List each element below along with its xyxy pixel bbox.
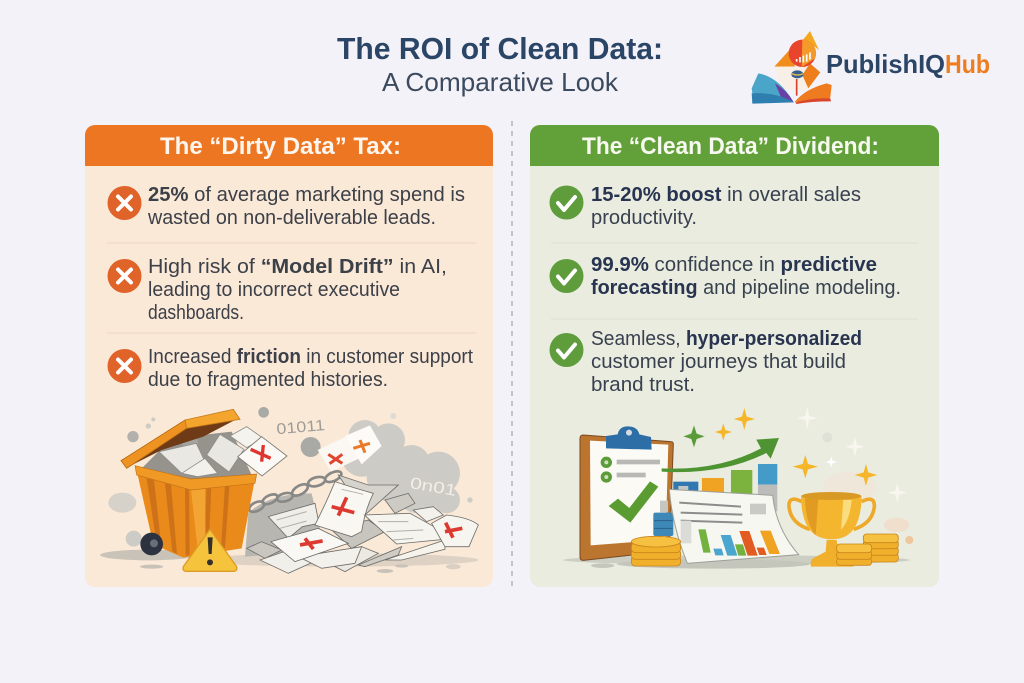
text: model drift: dashboards. [148,302,244,324]
icon: check 3 [550,333,584,367]
red crosses [300,497,462,549]
bin contents [142,432,252,483]
illustration: overflowing bin and paper pile [100,407,478,573]
divider: centre dashed line [511,121,513,590]
clipboard [580,426,673,560]
binary text: 01011 [276,417,326,438]
icon: cross 3 [108,349,142,383]
dust cloud [108,407,473,557]
illustration: clipboard, chart, trophy and coins [563,407,913,569]
ground shadow [563,555,910,569]
bin body [138,475,254,558]
text: wasted spend: 25% of average marketing spend is [148,184,465,206]
heading: dirty data: The “Dirty Data” Tax: [160,133,401,160]
title: The ROI of Clean Data: [337,31,663,66]
icon: logo book and balloon [752,31,832,104]
text: model drift [148,256,447,324]
text: friction: Increased friction in customer support [148,346,473,368]
icon: check 1 [550,186,584,220]
text: friction [148,346,473,391]
report bars [698,529,780,556]
coins right [837,534,898,565]
coins left [631,536,681,566]
text: forecasting [591,254,901,299]
panel: dirty data tax [85,125,493,587]
text: model drift: High risk of “Model Drift” in AI, [148,256,447,278]
text: journeys [591,328,862,396]
heading: clean data: The “Clean Data” Dividend: [582,133,879,160]
bin lid [130,420,235,466]
text: journeys: brand trust. [591,374,695,396]
title: A Comparative Look [382,67,619,97]
text: friction: due to fragmented histories. [148,369,388,391]
logo: PublishIQHub: PublishIQ [826,49,945,79]
binary text [276,417,458,500]
text: journeys: customer journeys that build [591,351,846,373]
title [337,31,663,97]
icon: cross 1 [108,186,142,220]
warning triangle [183,529,237,571]
floating papers [318,435,359,472]
icon: cross 2 [108,259,142,293]
background glows [822,432,913,544]
text: forecasting: forecasting and pipeline modeling. [591,277,901,299]
heading: clean data [530,125,939,166]
sparkles [683,407,907,503]
trophy [789,492,874,567]
text: forecasting: 99.9% confidence in predictive [591,254,877,276]
text: boost: productivity. [591,207,697,229]
arrow and bars behind chart [653,438,779,536]
text: boost [591,184,861,229]
text: journeys: Seamless, hyper-personalized [591,328,862,350]
paper pile [247,475,478,573]
report sheet [669,489,799,563]
text: boost: 15-20% boost in overall sales [591,184,861,206]
chain [248,469,343,514]
logo: PublishIQHub [752,31,990,104]
wheel [140,533,163,555]
text: model drift: leading to incorrect executive [148,279,400,301]
logo: PublishIQHub: Hub [945,49,990,79]
ground shadow [100,550,478,573]
binary text: 0n01 [409,475,458,500]
icon: check 2 [550,259,584,293]
panel: clean data dividend [530,125,939,587]
heading: dirty data [85,125,493,166]
text: wasted spend [147,184,465,229]
text: wasted spend: wasted on non-deliverable leads. [147,207,436,229]
